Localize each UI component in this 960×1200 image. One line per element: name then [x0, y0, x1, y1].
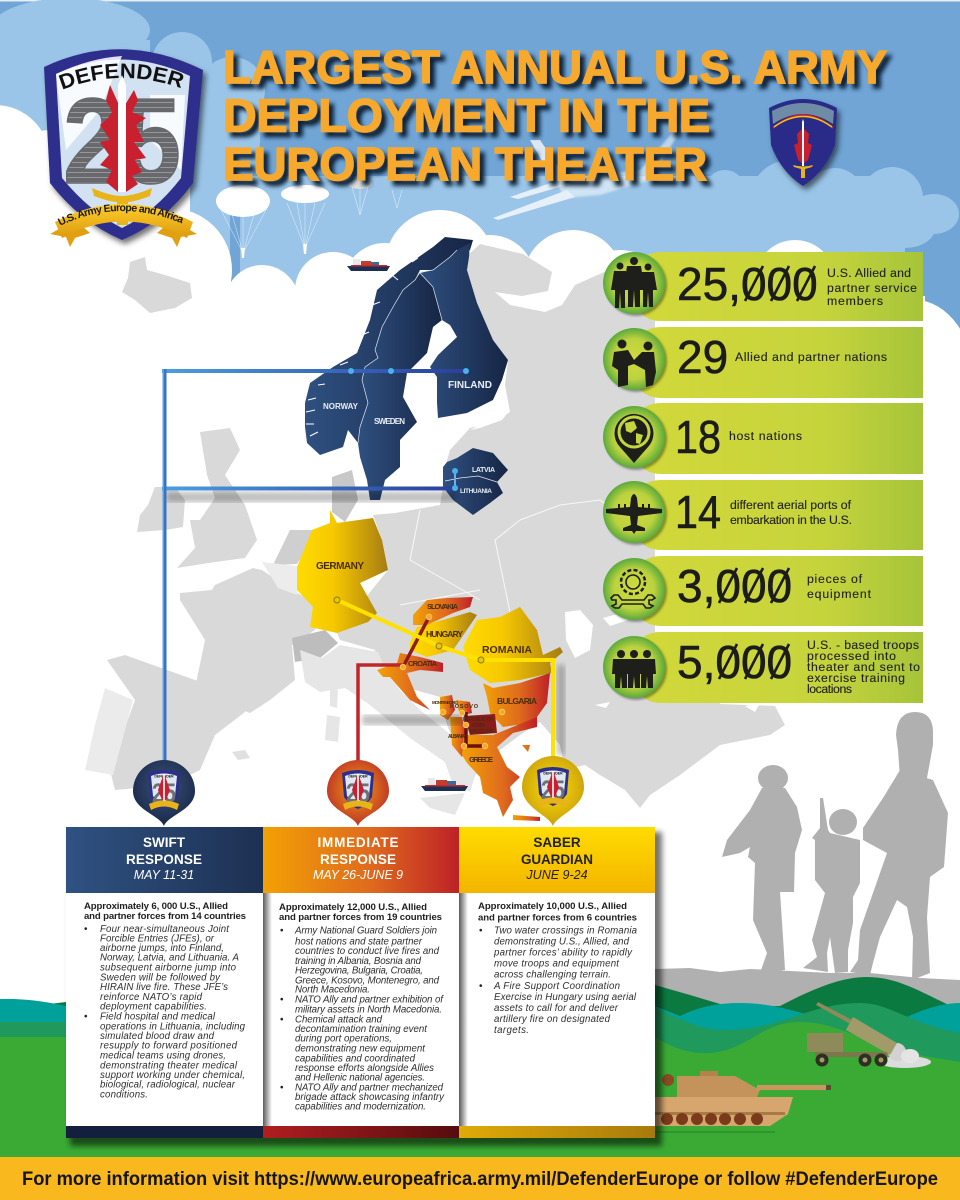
card body text: simulated blood draw and	[100, 1031, 215, 1042]
card heading: RESPONSE	[126, 852, 202, 867]
Ireland	[137, 487, 185, 532]
pale clouds	[0, 0, 959, 306]
soldier left	[722, 765, 802, 973]
map labels: GREECE	[469, 755, 493, 764]
footer band: For more information visit https://www.europeafrica.army.mil/DefenderEurope or follow #DefenderEurope	[22, 1169, 938, 1190]
rolling hills	[0, 977, 960, 1160]
panel: Immediate Response	[263, 827, 459, 1138]
card body text: artillery fire on designated	[494, 1014, 611, 1025]
label: different aerial ports of	[730, 498, 852, 512]
card body text: capabilities and coordinated	[295, 1053, 416, 1064]
France	[180, 568, 325, 713]
card body text: demonstrating theater medical	[100, 1060, 238, 1071]
card body text: Approximately 12,000 U.S., Allied	[279, 902, 427, 913]
label	[730, 498, 852, 527]
Saber Guardian countries	[297, 510, 563, 683]
mini badge: 25	[541, 775, 565, 805]
card body text: demonstrating new equipment	[295, 1043, 426, 1054]
map labels: CROATIA	[408, 659, 438, 668]
Finland	[420, 243, 508, 418]
card body text: Forcible Entries (JFEs), or	[100, 934, 215, 945]
mini badge	[342, 770, 374, 810]
Latvia and Lithuania	[443, 448, 508, 515]
stat: 3,000 pieces of equipment	[603, 556, 923, 626]
plane silhouette	[493, 122, 684, 220]
numeral: 25	[63, 73, 181, 209]
number: 3,000	[677, 560, 792, 612]
card body text	[279, 902, 445, 1113]
card body text: HIRAIN live fire. These JFE’s	[100, 982, 228, 993]
card body text: •	[280, 1014, 284, 1025]
number: 29	[677, 331, 728, 383]
Sweden	[358, 273, 442, 500]
Greek islands	[513, 745, 541, 821]
title: LARGEST ANNUAL U.S. ARMY	[223, 41, 887, 93]
label: U.S. Allied and	[827, 266, 911, 280]
card body text: and partner forces from 14 countries	[84, 911, 246, 922]
label: embarkation in the U.S.	[730, 513, 852, 527]
North Macedonia	[464, 714, 497, 735]
card body text: partner forces’ ability to rapidly	[493, 947, 633, 958]
Hungary	[410, 612, 477, 657]
label: pieces of	[807, 572, 863, 586]
map: Black Sea and country borders	[400, 410, 760, 712]
card body text: •	[479, 981, 483, 992]
Swift Response route	[162, 368, 469, 764]
Saber Guardian route	[334, 597, 553, 760]
card body text: across challenging terrain.	[494, 970, 611, 981]
Switzerland	[292, 630, 338, 662]
card body text: NATO Ally and partner exhibition of	[295, 995, 444, 1006]
card body text: military assets in North Macedonia.	[295, 1005, 442, 1016]
Spain	[107, 655, 250, 790]
card body text: resupply to forward positioned	[100, 1041, 238, 1052]
map labels: HUNGARY	[426, 629, 463, 639]
Immediate Response route	[358, 614, 505, 762]
label: members	[827, 294, 883, 308]
card body text: Sweden will be followed by	[100, 972, 221, 983]
card body text: capabilities and modernization.	[295, 1102, 426, 1113]
skyline	[655, 968, 960, 1020]
card body text: assets to call for and deliver	[494, 1003, 619, 1014]
card body text: Two water crossings in Romania	[494, 925, 638, 936]
label: partner service	[827, 281, 917, 295]
icon: globe pin	[614, 414, 654, 463]
card body text: and partner forces from 19 countries	[279, 912, 442, 923]
card body text	[478, 901, 638, 1036]
card body text: operations in Lithuania, including	[100, 1021, 246, 1032]
number: 18	[675, 411, 721, 463]
statistics panels	[603, 252, 923, 703]
card body text: training in Albania, Bosnia and	[295, 956, 422, 967]
soldier middle	[803, 798, 860, 973]
shield	[44, 49, 203, 240]
map labels: SWEDEN	[374, 417, 405, 426]
Italy	[300, 645, 480, 792]
Slovakia	[413, 597, 473, 625]
shipping vessel south	[421, 778, 468, 791]
map: grey European landmass	[85, 244, 785, 815]
card body text: •	[280, 925, 284, 936]
card body text: response efforts alongside Allies	[295, 1063, 434, 1074]
mission pin: Saber Guardian	[522, 756, 584, 826]
map labels: ALBANIA	[448, 734, 465, 740]
label	[807, 638, 920, 696]
title: EUROPEAN THEATER	[223, 138, 707, 190]
map labels: NORWAY	[323, 402, 359, 411]
card body text: •	[84, 1011, 88, 1022]
card body text: Herzegovina, Bulgaria, Croatia,	[295, 965, 423, 976]
card body text: reinforce NATO’s rapid	[100, 992, 203, 1003]
Romania	[463, 607, 563, 683]
icon: handshake	[612, 340, 656, 387]
card body text: •	[479, 925, 483, 936]
card body text: and Hellenic national agencies.	[295, 1073, 425, 1084]
card heading: IMMEDIATE	[318, 835, 398, 850]
card body text: countries to conduct live fires and	[295, 946, 440, 957]
mini badge: DEFENDER	[154, 774, 174, 778]
card body text: medical teams using drones,	[100, 1050, 226, 1061]
hilt	[92, 188, 152, 225]
label	[807, 572, 872, 601]
stat: 29 nations	[603, 327, 923, 398]
label: processed into	[807, 649, 896, 663]
sky background	[0, 0, 960, 360]
map labels: MACEDONIA	[470, 729, 494, 735]
card body text: A Fire Support Coordination	[493, 981, 620, 992]
Kosovo	[456, 700, 472, 716]
Portugal	[85, 688, 133, 775]
card body text: biological, radiological, nuclear	[100, 1080, 236, 1091]
label: exercise training	[807, 671, 905, 685]
mini badge: DEFENDER	[348, 774, 368, 778]
mini badge: DEFENDER	[543, 772, 563, 776]
card body text: Army National Guard Soldiers join	[294, 925, 437, 936]
card body text: targets.	[494, 1025, 529, 1036]
Iceland	[122, 257, 192, 313]
card body text: Field hospital and medical	[100, 1011, 216, 1022]
map labels: ROMANIA	[482, 644, 532, 656]
Belgium	[262, 562, 297, 595]
panel: Swift Response	[66, 827, 263, 1138]
Norway	[305, 237, 473, 455]
card body text: airborne jumps, into Finland,	[100, 943, 224, 954]
stat: 18 host nations	[603, 403, 923, 474]
card body text: support working under chemical,	[100, 1070, 245, 1081]
label: U.S. - based troops	[807, 638, 919, 652]
map labels: GERMANY	[316, 561, 364, 572]
map labels: REPUBLIC OF	[463, 717, 493, 723]
card body text: brigade attack showcasing infantry	[295, 1092, 445, 1103]
Germany	[297, 510, 388, 633]
mission pin: Immediate Response	[327, 760, 389, 826]
card body text: conditions.	[100, 1089, 148, 1100]
Bulgaria	[483, 673, 550, 727]
title	[223, 41, 887, 190]
soldier silhouettes and skyline	[655, 712, 960, 1020]
card body text: demonstrating U.S., Allied, and	[494, 936, 630, 947]
Albania	[450, 717, 468, 757]
map labels: MONTENEGRO	[432, 700, 458, 705]
label	[827, 266, 917, 308]
card body text: •	[84, 924, 88, 935]
rocket launcher vehicle	[807, 1002, 931, 1068]
Montenegro	[440, 695, 455, 720]
card body text	[84, 901, 246, 1100]
card heading: SABER	[533, 835, 581, 850]
map labels	[316, 380, 537, 764]
Great Britain	[177, 428, 257, 568]
card heading	[313, 835, 403, 882]
card body text: NATO Ally and partner mechanized	[295, 1082, 444, 1093]
panel: Saber Guardian	[459, 827, 655, 1138]
card body text: •	[280, 1082, 284, 1093]
card heading: JUNE 9-24	[525, 868, 588, 882]
stat: 25,000 service members	[603, 252, 923, 321]
card heading	[126, 835, 202, 882]
Defender 25 badge	[43, 49, 210, 248]
card body text: Norway, Latvia, and Lithuania. A	[100, 953, 239, 964]
card body text: host nations and state partner	[295, 936, 423, 947]
card heading: SWIFT	[143, 835, 186, 850]
card body text: Four near-simultaneous Joint	[100, 924, 230, 935]
map labels: BULGARIA	[497, 696, 537, 706]
card heading: GUARDIAN	[521, 852, 593, 867]
mini badge: 25	[152, 778, 176, 808]
Denmark	[332, 470, 358, 522]
card body text: during port operations,	[295, 1034, 392, 1045]
badge title: DEFENDER	[58, 64, 184, 90]
card body text: Chemical attack and	[295, 1014, 383, 1025]
icon: cargo plane	[606, 494, 662, 534]
number: 25,000	[677, 258, 818, 310]
card body text: move troops and equipment	[494, 959, 620, 970]
card heading	[521, 835, 593, 882]
Greece	[462, 717, 537, 817]
card body text: Greece, Kosovo, Montenegro, and	[295, 975, 440, 986]
card body text: •	[280, 995, 284, 1006]
card body text: deployment capabilities.	[100, 1002, 207, 1013]
route lines	[162, 368, 565, 764]
sword	[118, 75, 126, 192]
footer band	[0, 1157, 960, 1200]
title: DEPLOYMENT IN THE	[223, 90, 710, 142]
stat: 14 aerial ports	[603, 480, 923, 550]
map labels: LATVIA	[472, 467, 495, 474]
tank	[655, 1071, 831, 1133]
number: 5,000	[677, 636, 792, 688]
mini badge	[537, 767, 569, 807]
U.S. Army Europe and Africa shield insignia	[769, 99, 837, 186]
label: locations	[807, 682, 852, 696]
map labels: FINLAND	[448, 380, 492, 391]
mini badge: 25	[346, 778, 370, 808]
ribbon	[50, 204, 197, 247]
label: equipment	[807, 587, 872, 601]
label: host nations	[729, 429, 802, 443]
icon: three troops	[612, 650, 656, 688]
map labels: KOSOVO	[450, 704, 479, 710]
card body text: Exercise in Hungary using aerial	[494, 992, 637, 1003]
soldier right	[850, 712, 948, 980]
icon: gear and wrench	[611, 570, 655, 608]
Nordic countries	[305, 237, 508, 515]
paratroopers	[216, 179, 402, 258]
icon: three soldiers	[611, 257, 657, 308]
Immediate Response countries	[377, 597, 550, 821]
number: 14	[675, 486, 721, 538]
flames	[100, 85, 146, 192]
label: Allied and partner nations	[735, 350, 887, 364]
label: theater and sent to	[807, 660, 920, 674]
ribbon: U.S. Army Europe and Africa	[58, 204, 183, 225]
card body text: North Macedonia.	[295, 985, 370, 996]
mission pin: Swift Response	[133, 760, 195, 826]
map labels: SLOVAKIA	[427, 602, 459, 611]
card body text: and partner forces from 6 countries	[478, 913, 637, 924]
shipping vessel north	[347, 259, 390, 271]
stat: 5,000 troops	[603, 632, 923, 703]
card body text: subsequent airborne jump into	[100, 963, 237, 974]
mini badge	[148, 770, 180, 810]
card heading: RESPONSE	[320, 852, 396, 867]
card heading: MAY 26-JUNE 9	[313, 868, 403, 882]
map labels: LITHUANIA	[460, 488, 492, 495]
card body text: Approximately 6, 000 U.S., Allied	[84, 901, 228, 912]
Croatia	[377, 653, 443, 710]
Netherlands	[273, 530, 312, 565]
card body text: Approximately 10,000 U.S., Allied	[478, 901, 627, 912]
map labels: NORTH	[472, 723, 485, 729]
mission cards	[66, 827, 662, 1146]
card heading: MAY 11-31	[134, 868, 194, 882]
card body text: decontamination training event	[295, 1024, 428, 1035]
